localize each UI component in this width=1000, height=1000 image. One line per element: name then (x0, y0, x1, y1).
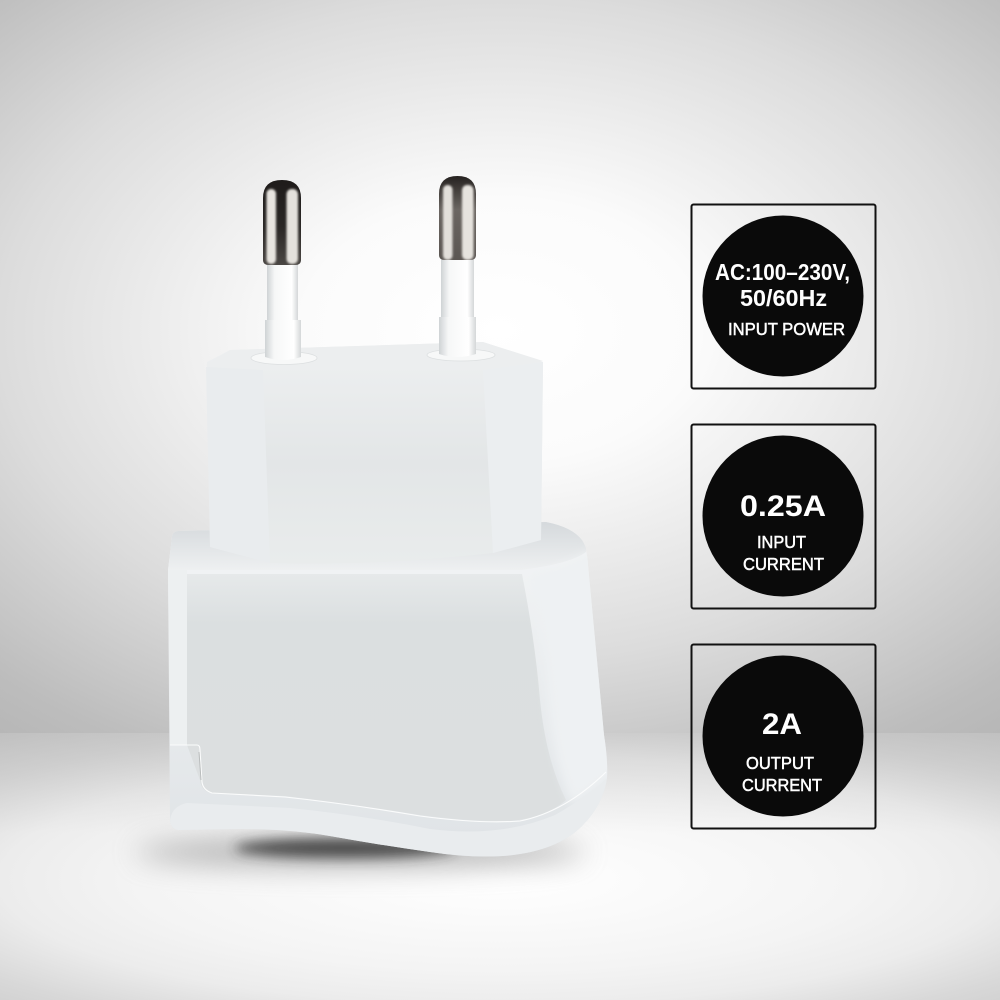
value: voltage: AC:100–230V, (715, 259, 850, 285)
lower housing right highlight (560, 680, 607, 798)
upper housing top face (206, 342, 543, 370)
spec card: input power (692, 204, 876, 388)
value: 0.25A: 0.25A (740, 490, 826, 523)
label: current: CURRENT (742, 775, 822, 795)
value: 2A: 2A (762, 708, 802, 741)
label: input: INPUT (757, 532, 806, 552)
floor shadow under charger (135, 837, 585, 867)
charger product photo (168, 176, 620, 856)
left plug pin (263, 180, 301, 320)
lower housing (168, 522, 620, 856)
label: output: OUTPUT (746, 753, 814, 773)
lower housing top face (168, 522, 586, 570)
upper housing left facet (206, 367, 270, 563)
spec card: input current (692, 424, 876, 608)
left pin collar base ring (251, 352, 317, 364)
lower housing seam (170, 745, 606, 822)
upper housing (206, 317, 543, 564)
label: input power: INPUT POWER (728, 319, 845, 339)
right plug pin (439, 176, 476, 317)
value: frequency: 50/60Hz (740, 285, 827, 311)
upper housing right facet (483, 362, 543, 553)
badge: input current (702, 436, 864, 596)
badge: output current (702, 656, 864, 816)
label: current: CURRENT (743, 554, 824, 574)
lower housing front panel (187, 574, 566, 821)
badge: input power (702, 216, 864, 376)
spec card: output current (692, 644, 876, 828)
right pin collar base ring (427, 349, 495, 361)
